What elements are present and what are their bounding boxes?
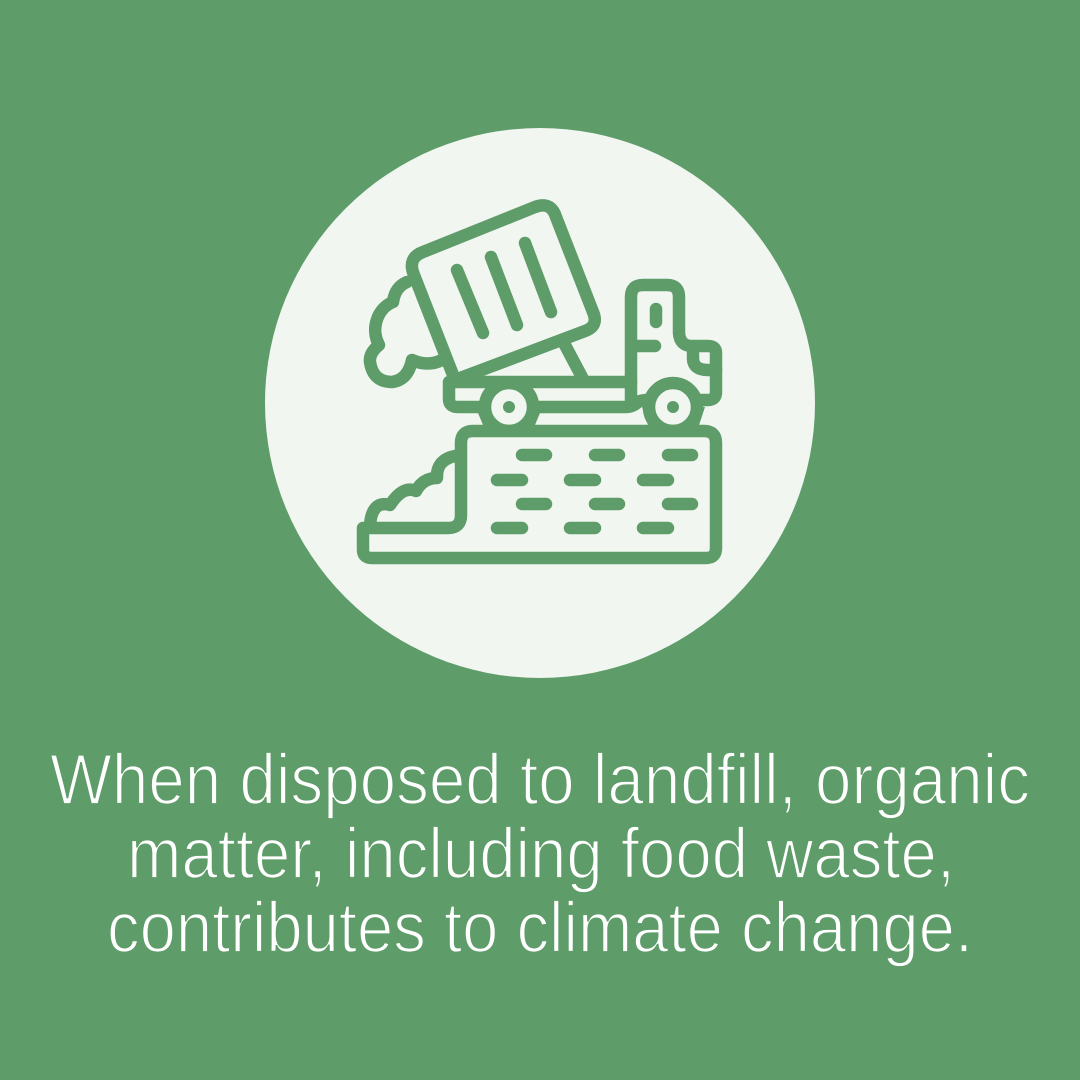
rear wheel [485,383,533,431]
wheel hubs [503,401,679,413]
caption [50,741,1030,968]
icon circle [265,128,815,678]
icon: dump truck tipping waste onto landfill [363,205,716,558]
headlight [693,350,716,370]
caption: matter, including food waste, [127,815,955,894]
lift arm [565,345,583,379]
landfill waste pile [370,456,455,525]
wheel mounts [478,407,705,425]
falling waste [370,282,442,382]
truck chassis [449,382,648,407]
cab window [650,309,662,322]
caption: When disposed to landfill, organic [50,741,1030,820]
front wheel [649,383,697,431]
caption: contributes to climate change. [107,889,973,968]
bed ribs [457,243,551,333]
door handle [637,340,655,352]
landfill layers [497,455,692,528]
landfill block [363,431,716,558]
truck cab [631,285,716,400]
tipping bed [412,205,595,380]
